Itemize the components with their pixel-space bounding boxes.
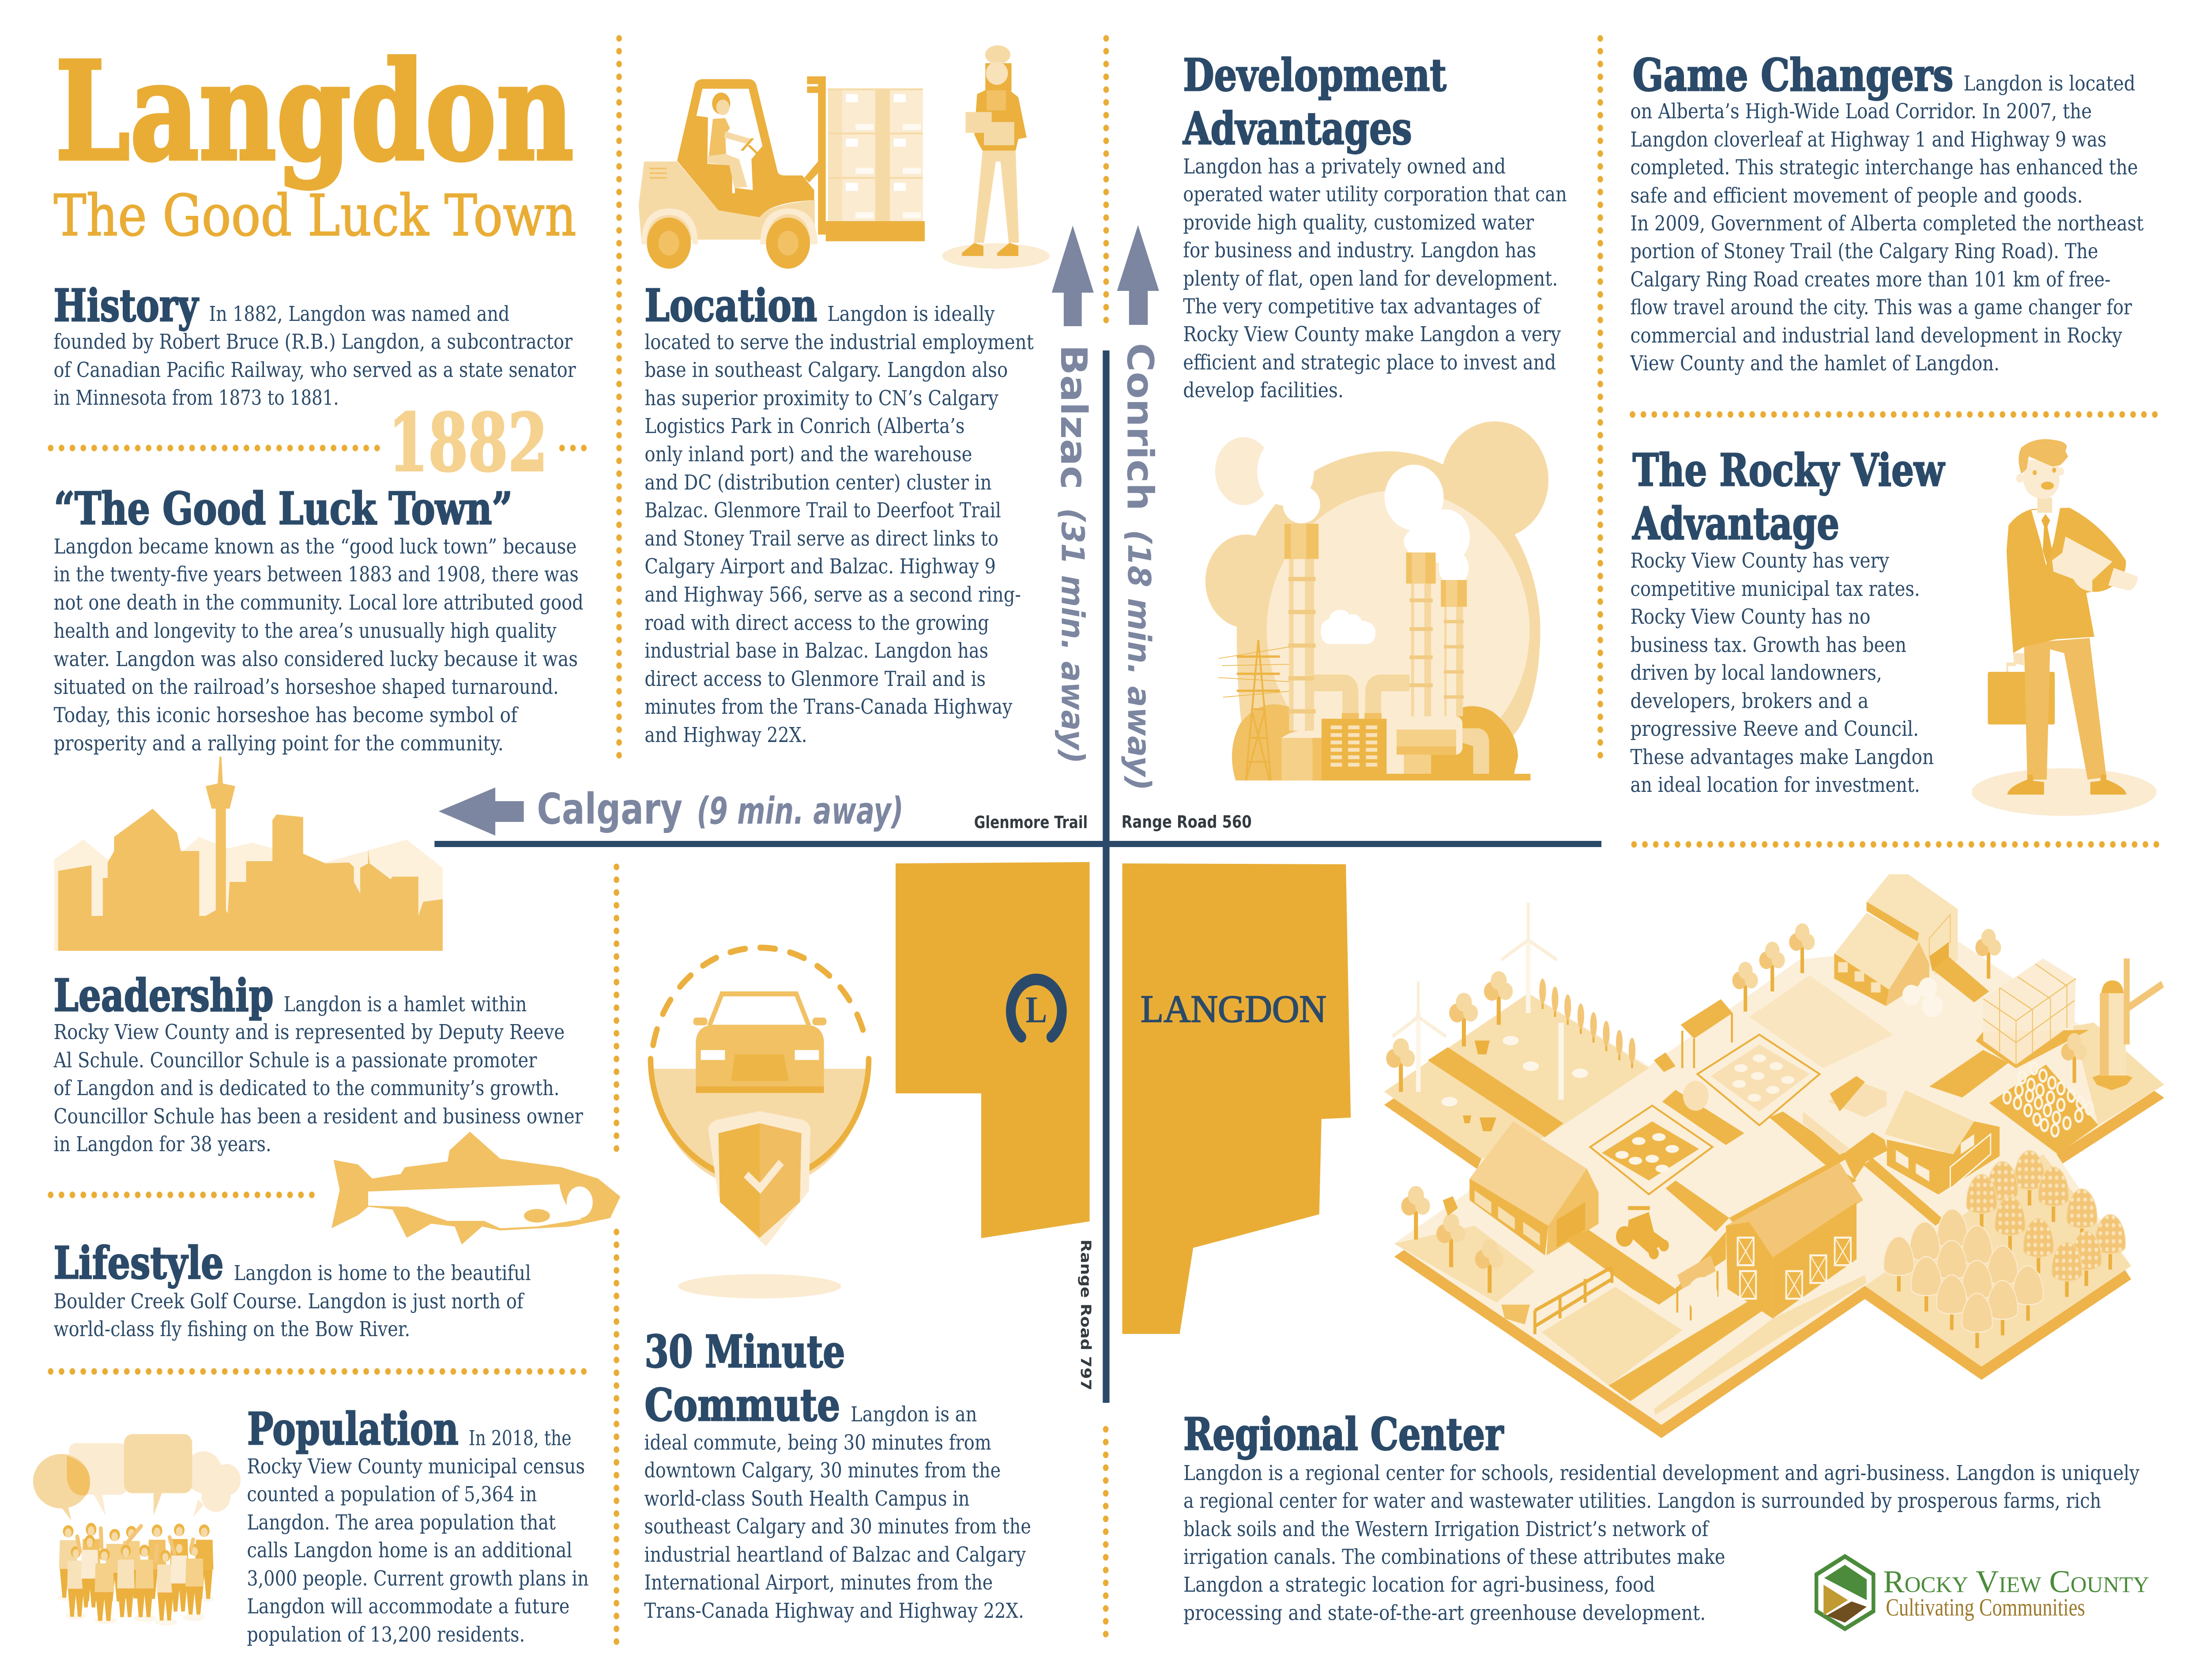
text: leadership body: Al Schule. Councillor Schule is a passionate promoter: [53, 1049, 537, 1073]
panel: 30 minute commute: [644, 1326, 1031, 1623]
text: good luck town body: in the twenty-five years between 1883 and 1908, there was: [54, 563, 579, 587]
label: Balzac distance: (31 min. away): [1054, 508, 1091, 764]
text: location body: Langdon is ideally: [827, 302, 995, 326]
text: rocky view body: driven by local landowners,: [1630, 661, 1882, 685]
label: Calgary distance: (9 min. away): [697, 790, 904, 832]
text: development body: plenty of flat, open land for development.: [1183, 267, 1558, 291]
label: Conrich distance: (18 min. away): [1121, 530, 1157, 791]
map: east parcel with Langdon label: [1122, 863, 1351, 1334]
heading: location: Location: [644, 279, 817, 331]
text: leadership body: Councillor Schule has been a resident and business owner: [54, 1105, 583, 1129]
text: good luck town body: situated on the railroad’s horseshoe shaped turnaround.: [54, 675, 559, 699]
text: good luck town body: [54, 535, 584, 756]
arrow: to Conrich: [1117, 225, 1159, 325]
text: lifestyle body: world-class fly fishing on the Bow River.: [54, 1318, 410, 1341]
text: Cultivating Communities tagline: Cultivating Communities: [1886, 1594, 2085, 1621]
text: location body: and DC (distribution center) cluster in: [644, 471, 992, 495]
panel: population: [247, 1403, 589, 1647]
heading: development advantages: [1183, 49, 1446, 154]
text: location body: industrial base in Balzac. Langdon has: [644, 639, 988, 663]
panel: the good luck town: [54, 482, 584, 756]
text: history body: [54, 302, 576, 410]
text: game changers body: [1630, 72, 2144, 376]
icon: horseshoe: [1011, 979, 1062, 1037]
text: population body: Langdon will accommodate a future: [247, 1595, 569, 1619]
logo: Rocky View County: [1816, 1556, 2149, 1629]
text: lifestyle body: Boulder Creek Golf Course. Langdon is just north of: [54, 1290, 524, 1314]
text: commute body: ideal commute, being 30 minutes from: [644, 1431, 991, 1455]
text: commute body: Trans-Canada Highway and Highway 22X.: [644, 1599, 1024, 1623]
illustration: calgary skyline: [54, 757, 443, 951]
text: rocky view body: Rocky View County has very: [1630, 549, 1889, 573]
icon: businessman: [1972, 439, 2157, 816]
text: game changers body: Langdon cloverleaf at Highway 1 and Highway 9 was: [1630, 128, 2106, 152]
text: population body: population of 13,200 residents.: [247, 1623, 525, 1647]
text: population body: counted a population of 5,364 in: [247, 1483, 537, 1507]
text: development body: develop facilities.: [1183, 379, 1344, 403]
text: commute body: world-class South Health Campus in: [644, 1487, 970, 1511]
text: development body: [1183, 155, 1567, 403]
heading: regional center: Regional Center: [1183, 1408, 1504, 1460]
illustration: isometric farm: [1384, 874, 2164, 1438]
text: good luck town body: not one death in the community. Local lore attributed good: [54, 591, 584, 615]
title: Langdon: [55, 32, 574, 191]
text: history body: In 1882, Langdon was named and: [209, 302, 509, 326]
text: location body: Balzac. Glenmore Trail to Deerfoot Trail: [644, 499, 1001, 523]
year divider: 1882: 1882: [388, 396, 548, 490]
panel: location: [644, 279, 1034, 747]
text: history body: founded by Robert Bruce (R.B.) Langdon, a subcontractor: [54, 330, 572, 354]
label: Calgary distance: Calgary: [537, 785, 682, 834]
text: development body: provide high quality, customized water: [1183, 211, 1534, 235]
text: game changers body: Calgary Ring Road creates more than 101 km of free-: [1630, 268, 2111, 292]
text: game changers body: on Alberta’s High-Wide Load Corridor. In 2007, the: [1630, 100, 2092, 124]
icon: factory: [1205, 422, 1548, 780]
heading: 30 minute commute: [644, 1326, 845, 1431]
text: location body: minutes from the Trans-Canada Highway: [644, 695, 1013, 719]
text: rocky view body: business tax. Growth has been: [1630, 633, 1906, 657]
text: rocky view body: an ideal location for investment.: [1630, 773, 1920, 797]
text: regional center body: irrigation canals. The combinations of these attributes make: [1183, 1545, 1725, 1569]
text: development body: efficient and strategic place to invest and: [1183, 351, 1556, 375]
text: location body: road with direct access to the growing: [644, 611, 989, 635]
label: Balzac distance: [1052, 345, 1094, 764]
heading: development advantages: Advantages: [1183, 102, 1412, 154]
icon: warehouse worker: [942, 45, 1050, 269]
heading: rocky view advantage: [1632, 444, 1945, 550]
text: lifestyle body: [54, 1262, 531, 1341]
heading: the good luck town: “The Good Luck Town”: [54, 482, 512, 535]
text: leadership body: [53, 993, 583, 1156]
text: development body: Langdon has a privately owned and: [1183, 155, 1506, 179]
text: game changers body: commercial and industrial land development in Rocky: [1630, 324, 2122, 348]
text: population body: Rocky View County municipal census: [247, 1455, 585, 1479]
text: population body: Langdon. The area population that: [247, 1511, 556, 1535]
label: Range Road 797: Range Road 797: [1077, 1239, 1094, 1390]
text: location body: Calgary Airport and Balzac. Highway 9: [644, 555, 996, 579]
text: game changers body: safe and efficient movement of people and goods.: [1630, 184, 2083, 208]
text: location body: and Highway 566, serve as a second ring-: [644, 583, 1021, 607]
text: regional center body: [1183, 1462, 2139, 1625]
text: leadership body: of Langdon and is dedicated to the community’s growth.: [54, 1077, 559, 1100]
icon: forklift: [639, 76, 925, 269]
panel: lifestyle: [54, 1237, 531, 1341]
text: Rocky View County wordmark: Rocky View County: [1883, 1564, 2149, 1599]
text: rocky view body: progressive Reeve and Council.: [1630, 717, 1919, 741]
panel: leadership: [53, 969, 583, 1156]
map: roads: [434, 350, 1601, 1403]
arrow: to Balzac: [1052, 226, 1094, 326]
text: population body: calls Langdon home is an additional: [247, 1539, 572, 1563]
text: game changers body: portion of Stoney Trail (the Calgary Ring Road). The: [1630, 240, 2098, 264]
text: regional center body: a regional center for water and wastewater utilities. Langdon is surrounded by prosperous farms, rich: [1183, 1489, 2101, 1513]
heading: 30 minute commute: Commute: [644, 1379, 840, 1431]
text: commute body: southeast Calgary and 30 minutes from the: [644, 1515, 1031, 1539]
icon: trout: [331, 1132, 620, 1245]
text: leadership body: Langdon is a hamlet within: [284, 993, 527, 1017]
text: location body: base in southeast Calgary. Langdon also: [644, 358, 1008, 382]
text: regional center body: black soils and the Western Irrigation District’s network of: [1183, 1518, 1710, 1541]
text: regional center body: Langdon a strategic location for agri-business, food: [1183, 1573, 1655, 1597]
text: population body: 3,000 people. Current growth plans in: [247, 1567, 589, 1591]
text: development body: for business and industry. Langdon has: [1183, 239, 1536, 263]
text: rocky view body: [1630, 549, 1934, 797]
text: good luck town body: health and longevity to the area’s unusually high quality: [54, 619, 557, 643]
text: game changers body: flow travel around the city. This was a game changer for: [1630, 296, 2132, 320]
arrow: to Calgary: [439, 787, 524, 836]
text: game changers body: View County and the hamlet of Langdon.: [1630, 352, 2000, 376]
text: population body: In 2018, the: [469, 1427, 572, 1450]
heading: rocky view advantage: Advantage: [1632, 497, 1839, 550]
map: east parcel with Langdon label: LANGDON: [1141, 987, 1326, 1030]
label: Balzac distance: Balzac: [1052, 345, 1094, 490]
text: history body: of Canadian Pacific Railway, who served as a state senator: [54, 358, 576, 382]
text: rocky view body: competitive municipal tax rates.: [1630, 577, 1920, 601]
text: good luck town body: water. Langdon was also considered lucky because it was: [54, 648, 578, 671]
text: development body: The very competitive tax advantages of: [1183, 295, 1541, 319]
panel: game changers: [1630, 49, 2144, 376]
heading: rocky view advantage: The Rocky View: [1633, 444, 1945, 496]
text: commute body: industrial heartland of Balzac and Calgary: [644, 1543, 1026, 1567]
heading: game changers: Game Changers: [1633, 49, 1953, 101]
text: rocky view body: developers, brokers and a: [1630, 689, 1868, 713]
text: commute body: [644, 1403, 1031, 1623]
text: location body: only inland port) and the warehouse: [644, 443, 972, 467]
text: rocky view body: These advantages make Langdon: [1630, 746, 1934, 769]
label: Conrich distance: [1119, 343, 1161, 791]
text: good luck town body: Today, this iconic horseshoe has become symbol of: [54, 704, 519, 727]
text: location body: located to serve the industrial employment: [644, 331, 1034, 354]
icon: car and safety shield: [651, 948, 869, 1298]
icon: hexagon logo mark: [1816, 1556, 1873, 1629]
heading: development advantages: Development: [1183, 49, 1446, 101]
text: game changers body: In 2009, Government of Alberta completed the northeast: [1630, 212, 2144, 236]
heading: leadership: Leadership: [54, 969, 274, 1021]
text: lifestyle body: Langdon is home to the beautiful: [234, 1262, 531, 1285]
icon: horseshoe: L: [1025, 989, 1047, 1031]
text: game changers body: Langdon is located: [1963, 72, 2135, 96]
text: development body: Rocky View County make Langdon a very: [1183, 323, 1561, 347]
text: leadership body: Rocky View County and is represented by Deputy Reeve: [54, 1021, 565, 1044]
panel: regional center: [1183, 1408, 2139, 1625]
text: location body: has superior proximity to CN’s Calgary: [644, 387, 998, 411]
text: location body: and Highway 22X.: [644, 723, 807, 747]
text: location body: and Stoney Trail serve as direct links to: [644, 527, 998, 551]
heading: 30 minute commute: 30 Minute: [644, 1326, 845, 1378]
text: regional center body: processing and state-of-the-art greenhouse development.: [1183, 1601, 1706, 1625]
label: Conrich distance: Conrich: [1119, 343, 1161, 511]
text: good luck town body: prosperity and a rallying point for the community.: [54, 732, 504, 756]
text: game changers body: completed. This strategic interchange has enhanced the: [1630, 156, 2138, 180]
panel: history: [54, 279, 576, 410]
text: population body: [247, 1427, 589, 1647]
text: leadership body: in Langdon for 38 years.: [54, 1133, 271, 1156]
panel: rocky view advantage: [1630, 439, 2157, 816]
text: location body: direct access to Glenmore Trail and is: [644, 667, 986, 691]
text: location body: [644, 302, 1034, 747]
text: commute body: Langdon is an: [851, 1403, 977, 1427]
text: good luck town body: Langdon became known as the “good luck town” because: [54, 535, 577, 559]
text: commute body: International Airport, minutes from the: [644, 1571, 993, 1595]
text: location body: Logistics Park in Conrich (Alberta’s: [644, 414, 964, 438]
text: regional center body: Langdon is a regional center for schools, residential development and agri-business. Langdon is uniquely: [1183, 1462, 2139, 1485]
panel: development advantages: [1183, 49, 1567, 403]
text: commute body: downtown Calgary, 30 minutes from the: [644, 1459, 1001, 1483]
text: history body: in Minnesota from 1873 to 1881.: [54, 386, 339, 410]
heading: history: History: [54, 279, 199, 331]
label: Glenmore Trail: Glenmore Trail: [974, 813, 1088, 832]
heading: lifestyle: Lifestyle: [54, 1237, 224, 1289]
label: Range Road 560: Range Road 560: [1122, 813, 1252, 832]
text: development body: operated water utility corporation that can: [1183, 183, 1567, 207]
map: west parcel with horseshoe: [896, 862, 1090, 1238]
heading: population: Population: [247, 1403, 459, 1455]
text: rocky view body: Rocky View County has no: [1630, 605, 1871, 629]
icon: crowd with speech bubbles: [33, 1434, 241, 1626]
label: Calgary distance: [537, 785, 904, 834]
subtitle: The Good Luck Town: [54, 183, 576, 249]
